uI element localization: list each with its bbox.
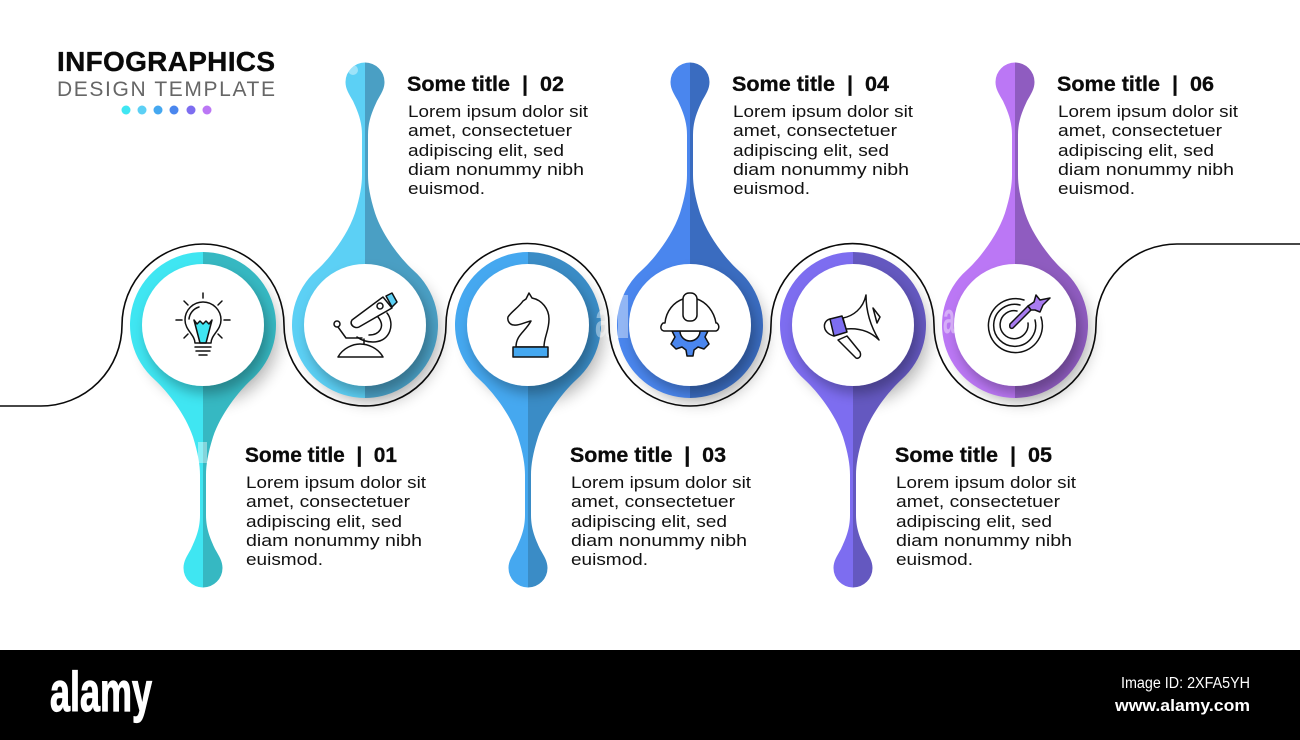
soft shadow <box>141 265 281 405</box>
title 05: Some title | 05 <box>895 444 1052 467</box>
body 06: euismod. <box>1058 179 1135 198</box>
heading: INFOGRAPHICS <box>57 46 275 77</box>
step 6 marker <box>942 62 1093 405</box>
body 05: amet, consectetuer <box>896 492 1060 511</box>
body 06 <box>1058 102 1238 198</box>
text block 05 <box>895 444 1076 569</box>
inner circle <box>792 264 914 386</box>
title 04: Some title | 04 <box>732 73 889 96</box>
title block <box>57 46 275 114</box>
title 02: Some title | 02 <box>407 73 564 96</box>
body 02: adipiscing elit, sed <box>408 141 564 160</box>
title 01: Some title | 01 <box>245 444 397 467</box>
step 3 marker <box>455 252 606 588</box>
soft shadow <box>303 265 443 405</box>
body 02: diam nonummy nibh <box>408 160 584 179</box>
body 03: adipiscing elit, sed <box>571 512 727 531</box>
body 03: Lorem ipsum dolor sit <box>571 473 751 492</box>
drop pointing up <box>942 62 1088 398</box>
text block 02 <box>407 73 588 198</box>
body 02: Lorem ipsum dolor sit <box>408 102 588 121</box>
icon: megaphone <box>824 295 880 358</box>
inner circle <box>467 264 589 386</box>
text block 03 <box>570 444 751 569</box>
body 01 <box>246 473 426 569</box>
icon: chess knight <box>508 293 549 357</box>
body 02: amet, consectetuer <box>408 121 572 140</box>
icon: microscope <box>334 293 397 357</box>
soft shadow <box>466 265 606 405</box>
body 04: adipiscing elit, sed <box>733 141 889 160</box>
website: www.alamy.com <box>1114 697 1250 715</box>
drop pointing down <box>130 252 276 588</box>
body 05: Lorem ipsum dolor sit <box>896 473 1076 492</box>
body 03: amet, consectetuer <box>571 492 735 511</box>
body 04: diam nonummy nibh <box>733 160 909 179</box>
inner circle <box>304 264 426 386</box>
watermark fragments <box>198 65 955 463</box>
body 03: diam nonummy nibh <box>571 531 747 550</box>
subheading: DESIGN TEMPLATE <box>57 78 275 101</box>
soft shadow <box>953 265 1093 405</box>
drop pointing up <box>617 62 763 398</box>
watermark fragments: a <box>595 292 612 348</box>
drop pointing down <box>455 252 601 588</box>
footer bar <box>0 650 1300 740</box>
body 03 <box>571 473 751 569</box>
body 06: amet, consectetuer <box>1058 121 1222 140</box>
drop pointing up <box>292 62 438 398</box>
body 05: adipiscing elit, sed <box>896 512 1052 531</box>
body 02 <box>408 102 588 198</box>
body 01: diam nonummy nibh <box>246 531 422 550</box>
watermark fragments: a <box>943 294 955 343</box>
body 01: euismod. <box>246 550 323 569</box>
body 02: euismod. <box>408 179 485 198</box>
body 04 <box>733 102 913 198</box>
colour dots <box>122 106 212 114</box>
body 03: euismod. <box>571 550 648 569</box>
step 1 marker <box>130 252 281 588</box>
text block 04 <box>732 73 913 198</box>
body 01: amet, consectetuer <box>246 492 410 511</box>
step 2 marker <box>292 62 443 405</box>
soft shadow <box>628 265 768 405</box>
body 04: euismod. <box>733 179 810 198</box>
body 04: Lorem ipsum dolor sit <box>733 102 913 121</box>
step 4 marker <box>617 62 768 405</box>
icon: helmet and gear <box>661 293 719 356</box>
text block 06 <box>1057 73 1238 198</box>
body 05 <box>896 473 1076 569</box>
body 01: Lorem ipsum dolor sit <box>246 473 426 492</box>
text block 01 <box>245 444 426 569</box>
body 04: amet, consectetuer <box>733 121 897 140</box>
inner circle <box>954 264 1076 386</box>
image id: Image ID: 2XFA5YH <box>1121 675 1250 692</box>
inner circle <box>142 264 264 386</box>
icon: target with arrow <box>988 295 1050 353</box>
title 06: Some title | 06 <box>1057 73 1214 96</box>
title 03: Some title | 03 <box>570 444 726 467</box>
step 5 marker <box>780 252 931 588</box>
body 06: adipiscing elit, sed <box>1058 141 1214 160</box>
body 05: euismod. <box>896 550 973 569</box>
alamy logo: alamy <box>50 660 152 723</box>
soft shadow <box>791 265 931 405</box>
body 01: adipiscing elit, sed <box>246 512 402 531</box>
connector line <box>0 243 1300 406</box>
inner circle <box>629 264 751 386</box>
icon: light bulb <box>176 293 230 355</box>
body 06: diam nonummy nibh <box>1058 160 1234 179</box>
drop pointing down <box>780 252 926 588</box>
body 05: diam nonummy nibh <box>896 531 1072 550</box>
body 06: Lorem ipsum dolor sit <box>1058 102 1238 121</box>
